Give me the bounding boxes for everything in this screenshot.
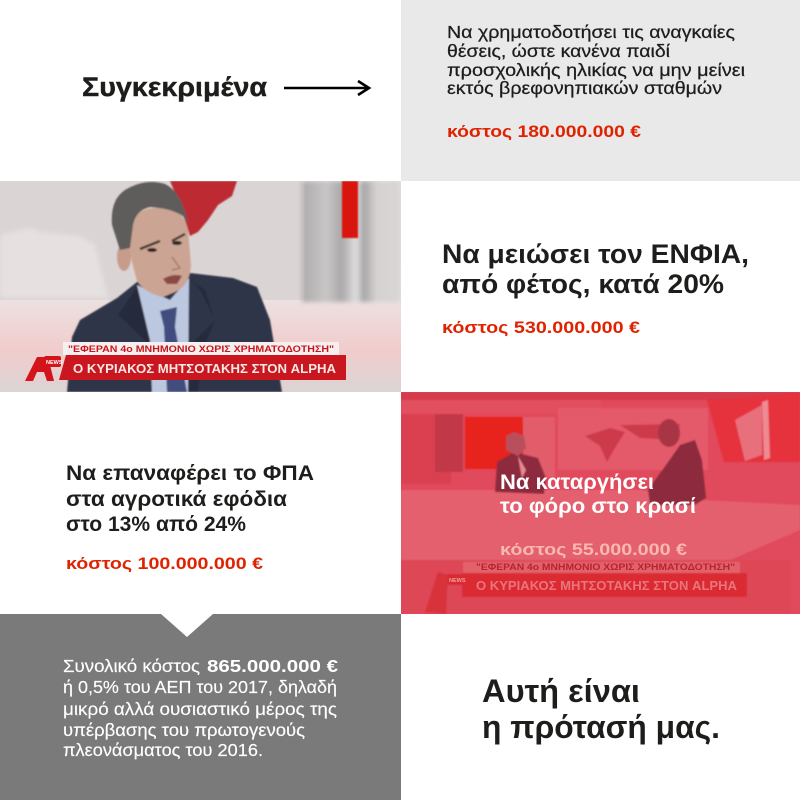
hair [112,182,188,250]
panel: total cost: ή 0,5% του ΑΕΠ του 2017, δηλαδή [63,677,337,697]
panel: wine tax with red-tinted photo [401,392,800,614]
panel: wine tax with red-tinted photo: το φόρο στο κρασί [500,494,696,518]
panel: childcare places: κόστος 180.000.000 € [447,122,642,141]
ear [117,243,131,271]
heading: Συγκεκριμένα: Συγκεκριμένα [82,72,267,102]
brows, eyes, mouth [140,234,185,249]
panel: farm VAT: Να επαναφέρει το ΦΠΑ [66,461,314,485]
caption banner in photo: "ΕΦΕΡΑΝ 4ο ΜΝΗΜΟΝΙΟ ΧΩΡΙΣ ΧΡΗΜΑΤΟΔΟΤΗΣΗ" [68,344,334,355]
panel: ENFIA reduction: από φέτος, κατά 20% [442,269,724,299]
left man [495,452,546,494]
shirt [137,278,189,392]
panel: wine tax with red-tinted photo: κόστος 55.000.000 € [500,540,688,559]
closing statement: η πρότασή μας. [482,709,720,745]
caption banner in photo: NEWS [46,360,63,366]
caption banner in photo: Ο ΚΥΡΙΑΚΟΣ ΜΗΤΣΟΤΑΚΗΣ ΣΤΟΝ ALPHA [73,361,337,376]
table [401,490,800,560]
arrow [284,81,369,95]
panel: wine tax with red-tinted photo: Ο ΚΥΡΙΑΚΟΣ ΜΗΤΣΟΤΑΚΗΣ ΣΤΟΝ ALPHA [476,578,738,593]
face [128,207,191,297]
panel: total cost: μικρό αλλά ουσιαστικό μέρος της [63,699,337,719]
panel: childcare places [401,0,800,181]
panel: childcare places: Να χρηματοδοτήσει τις αναγκαίες [447,22,735,42]
panel: ENFIA reduction: Να μειώσει τον ΕΝΦΙΑ, [442,239,749,269]
panel: total cost: 865.000.000 € [207,656,338,676]
panel: ENFIA reduction: κόστος 530.000.000 € [442,318,641,337]
panel: wine tax with red-tinted photo: "ΕΦΕΡΑΝ 4ο ΜΝΗΜΟΝΙΟ ΧΩΡΙΣ ΧΡΗΜΑΤΟΔΟΤΗΣΗ" [476,562,735,573]
caption banner in photo [25,342,346,381]
closing statement [482,673,720,745]
panel: total cost: πλεονάσματος του 2016. [63,740,263,760]
panel: farm VAT [66,461,314,573]
panel: childcare places: εκτός βρεφονηπιακών σταθμών [447,78,722,98]
tie [160,307,187,392]
photo: TV interview [0,181,401,392]
panel: wine tax with red-tinted photo: Να καταργήσει [500,470,654,494]
panel: farm VAT: στο 13% από 24% [66,512,246,536]
panel: ENFIA reduction [442,239,749,337]
pointer triangle [161,614,213,637]
suit [67,273,282,392]
closing statement: Αυτή είναι [482,673,640,709]
panel: childcare places: θέσεις, ώστε κανένα παιδί [447,41,670,61]
panel: farm VAT: στα αγροτικά εφόδια [66,487,287,511]
panel: childcare places: προσχολικής ηλικίας να μην μείνει [447,60,745,80]
panel: total cost [0,614,401,800]
panel: total cost: υπέρβασης του πρωτογενούς [63,720,305,740]
right man [648,440,706,505]
panel: total cost: Συνολικό κόστος [63,656,200,676]
lapel [189,284,213,392]
panel: wine tax with red-tinted photo: NEWS [449,578,466,584]
panel: farm VAT: κόστος 100.000.000 € [66,554,264,573]
